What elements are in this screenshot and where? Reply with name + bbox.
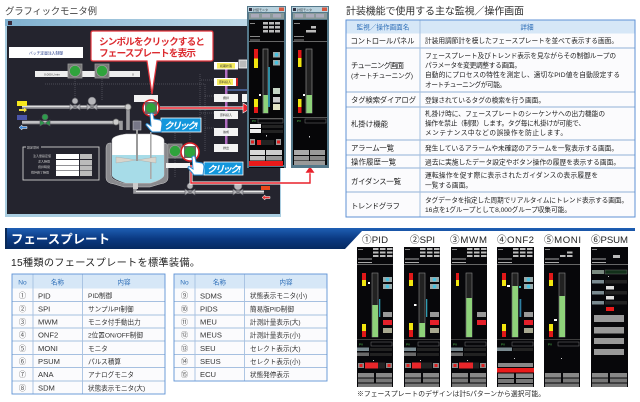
table: faceplates 1-8: PID [38,291,51,300]
callout: フェースプレートを表示 [99,48,196,60]
row: tag search: タグ検索ダイアログ [351,96,417,104]
row: tuning: パラメータを変更調整する画面。 [425,60,521,70]
table: faceplates 9-15: PIDS [200,304,218,314]
row: trend graph: 16点を1グループとして8,000グループ収集可能。 [425,205,571,214]
table 2 header [174,274,327,288]
table: faceplates 9-15: ⑨ [181,291,189,300]
row: guidance list [351,170,598,190]
faceplate: ONF2: PV [501,342,505,346]
banner: faceplate: フェースプレート [11,232,110,246]
row: alarm list [351,143,618,152]
row: tag out: メンテナンス中などの誤操作を防止します。 [425,128,567,137]
label: SPI: ②SPI [410,235,435,246]
table: faceplates 9-15: SEUS [200,357,221,366]
table: faceplates 9-15 [174,274,327,381]
row: tag search [351,95,545,104]
click badge 1: クリック! [164,121,198,132]
symbol ring 2 [181,143,199,161]
label: PID: ①PID [362,235,388,246]
flow meter bar: 0.000 L/min [44,72,60,76]
faceplate: MWM [451,247,487,387]
table: faceplates 9-15: 簡易版PID制御 [250,304,294,314]
faceplate window 2: 計装モニタ [297,7,312,12]
table: faceplates 1-8: SDM [38,384,55,392]
row: control panel: コントロールパネル [350,36,415,45]
table: faceplates 1-8: ⑤ [19,344,27,353]
title plate: バッチ定量注入制御 [29,50,63,56]
process column [214,60,248,152]
process column: 初期状態 [220,63,232,68]
settings panel: 撹拌時間 [38,164,50,169]
faceplate window 1: PV [252,119,256,123]
table: faceplates 1-8: SPI [38,304,50,314]
table header [346,20,635,34]
arrow: symbol to faceplate 2 [191,165,315,183]
settings panel: 注入時間 [38,158,50,164]
click badge 2: クリック! [207,164,241,176]
table 1 header [12,274,165,288]
row: operation history: 操作履歴一覧 [351,158,397,166]
label: MONI: ⑤MONI [544,235,581,246]
arrow: symbol to faceplate 1 [160,103,251,113]
table: faceplates 1-8: ① [19,291,27,300]
table: faceplates 9-15: MEUS [200,330,222,340]
tank [106,121,168,189]
faceplate: SPI: PV [406,342,410,346]
faceplate window 2: PV [297,119,301,123]
settings panel: 撹拌終了時間 [31,170,49,174]
row: tuning: (オートチューニング) [351,71,413,80]
faceplate: SPI [404,247,440,387]
flow meter bar: 0 [132,72,134,76]
faceplate: PID: PV [359,342,363,346]
table: faceplates 1-8: ⑧ [19,384,27,392]
table: faceplates 1-8: モニタ付手動出力 [88,318,141,326]
table: faceplates 1-8: ② [19,304,27,314]
table: faceplates 1-8: ③ [19,318,27,326]
row: control panel: 計装用調節計を模したフェースプレートを並べて表示する画面。 [425,36,618,45]
table: faceplates 1-8: ⑥ [19,357,27,366]
table header: 監視／操作画面名 [357,22,409,31]
table: faceplates 9-15: ⑭ [181,357,189,366]
table: faceplates 1-8: ANA [38,370,55,379]
flow meter bar [35,71,140,77]
row: operation history: 過去に実施したデータ設定やボタン操作の履歴を表示する画面。 [425,157,620,166]
faceplate window 2 [291,6,329,168]
valves [40,97,243,195]
faceplate: MWM: PV [453,342,457,346]
row: tuning [351,51,620,89]
faceplate: PID [357,247,393,387]
row: alarm list: 発生しているアラームや未確認のアラームを一覧表示する画面。 [425,143,618,152]
row: tuning: オートチューニングが可能。 [425,80,506,89]
table: faceplates 1-8: MWM [38,318,58,326]
row: alarm list: アラーム一覧 [351,144,395,152]
row: trend graph: トレンドグラフ [351,202,400,210]
table header: 詳細 [520,22,534,31]
table: monitoring screens [346,20,635,217]
table: faceplates 1-8: ④ [19,330,27,340]
table: faceplates 1-8: PID制御 [88,291,113,300]
faceplate: MONI [544,247,580,387]
table: faceplates 1-8 [12,274,165,394]
table 1 header: No [18,279,27,286]
pipes [22,104,264,192]
table: faceplates 1-8: 状態表示モニタ(大) [88,384,145,392]
table 2 header: No [180,279,189,286]
row: tag out: 操作を禁止（制限）します。タグ毎に札掛けが可能で、 [425,118,585,128]
table: faceplates 9-15: セレクト表示(大) [250,344,301,353]
table: faceplates 9-15: MEU [200,318,217,326]
label: MWM: ③MWM [450,235,487,246]
heading: monitoring screens: 計装機能で使用する主な監視／操作画面 [346,4,524,18]
table: faceplates 9-15: ⑪ [181,318,189,326]
table: faceplates 9-15: ⑩ [181,304,189,314]
table: faceplates 1-8: 2位置ON/OFF制御 [88,330,143,340]
click badge 1 [146,113,201,132]
click badge 2 [188,156,243,176]
small tag boxes [134,95,190,168]
row: trend graph: タグデータを指定した周期でリアルタイムにトレンド表示する画面。 [425,196,628,204]
banner: faceplate [5,228,635,249]
symbol ring 1 [143,100,159,116]
row: tuning: 自動的にプロセスの特性を測定し、適切なPID値を自動設定する [425,70,620,79]
table 1 header: 内容 [117,277,131,286]
table: faceplates 1-8: パルス積算 [88,357,121,366]
faceplate: PSUM [591,247,628,387]
row: guidance list: ガイダンス一覧 [351,177,402,186]
process column: 攪拌 [223,95,229,100]
table: faceplates 9-15: ⑫ [181,330,189,340]
process column: 原料投入 [220,112,232,117]
row: guidance list: 一覧する画面。 [425,180,472,190]
table: faceplates 9-15: ⑬ [181,344,189,353]
faceplate window 1 [247,6,286,168]
row: tag out [351,109,605,137]
row: tuning: フェースプレート及びトレンド表示を見ながらその制御ループの [425,51,616,60]
row: tag search: 登録されているタグの検索を行う画面。 [425,95,545,104]
title plate [9,47,83,58]
table: faceplates 1-8: アナログモニタ [88,370,134,379]
row: guidance list: 運転操作を促す際に表示されたガイダンスの表示履歴を [425,170,598,180]
table: faceplates 9-15: 状態表示モニタ(小) [250,291,307,300]
symbols [68,64,182,158]
table: faceplates 9-15: SDMS [200,291,222,300]
row: control panel [350,36,618,45]
row: tag out: 札掛け時に、フェースプレートのシーケンサへの出力機能の [425,109,605,118]
dotted signal lines [45,74,214,178]
table 1 header: 名称 [51,277,64,286]
table 2 header: 名称 [213,277,226,286]
panel: graphic monitor window [5,19,281,217]
row: trend graph [351,196,628,214]
table: faceplates 9-15: セレクト表示(小) [250,357,301,366]
callout: シンボルをクリックすると [99,36,205,48]
table: faceplates 9-15: ECU [200,370,216,379]
heading: graphic monitor example: グラフィックモニタ例 [5,6,97,16]
table: faceplates 9-15: 状態発停表示 [250,370,290,379]
table: faceplates 1-8: ONF2 [38,330,58,340]
row: tag out: 札掛け機能 [351,120,389,128]
table: faceplates 1-8: PSUM [38,357,60,366]
process column: 原料投入 [219,79,231,84]
faceplate window 1: 計装モニタ [253,7,268,12]
table: faceplates 9-15: SEU [200,344,216,353]
table: faceplates 1-8: サンプルPI制御 [88,304,134,314]
label: PSUM: ⑥PSUM [591,235,628,246]
process column: 熟成 [223,129,229,134]
settings panel: 設定項目 [27,144,39,150]
table: faceplates 9-15: ⑮ [181,370,189,379]
faceplate: ONF2 [497,247,534,387]
table: faceplates 9-15: 計測計量表示(大) [250,318,301,326]
inlet and outlet labels [17,101,270,200]
settings panel [23,144,99,180]
settings panel: 注入量設定値 [33,153,51,158]
table: faceplates 1-8: モニタ [88,344,108,353]
row: tuning: チューニング画面 [351,61,404,70]
row: operation history [351,157,620,166]
label: ONF2: ④ONF2 [497,235,534,246]
table 2 header: 内容 [279,277,293,286]
table: faceplates 9-15: 計測計量表示(小) [250,330,301,340]
callout [91,31,213,94]
process column: 排出 [223,145,229,150]
footnote: ※フェースプレートのデザインは計5パターンから選択可能。 [357,389,545,398]
intro text: 15種類のフェースプレートを標準装備。 [11,256,200,269]
faceplate: MONI: PV [548,342,552,346]
table: faceplates 1-8: ⑦ [19,370,27,379]
table: faceplates 1-8: MONI [38,344,58,353]
